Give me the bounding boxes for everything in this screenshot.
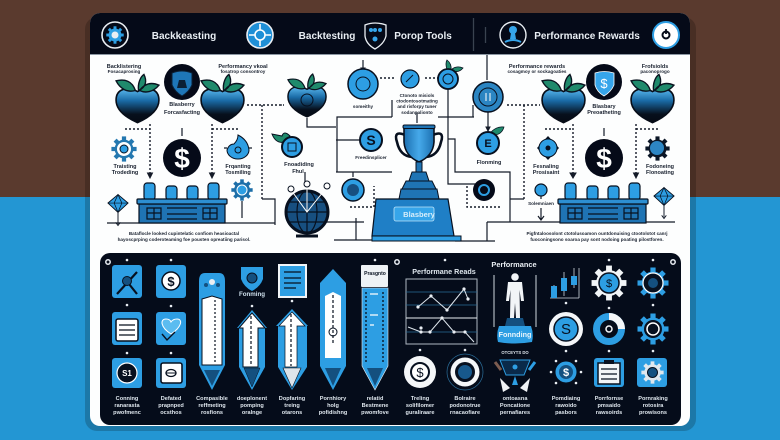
header icon: target bbox=[247, 22, 273, 48]
right center label bbox=[587, 104, 621, 116]
right center label: Preoatheting bbox=[587, 110, 621, 116]
dark circle icon bbox=[473, 179, 495, 201]
blue gear bbox=[638, 268, 668, 298]
bottom labels left: Conning bbox=[116, 396, 139, 402]
gear right label: Flonoating bbox=[646, 170, 674, 176]
label: holg bbox=[327, 403, 339, 409]
shield badge right: $ bbox=[600, 76, 608, 91]
label: rosfions bbox=[201, 410, 223, 416]
header icon: shield bbox=[365, 23, 386, 49]
white gear: $ bbox=[606, 278, 612, 290]
leaf icon label: Fnoadiding bbox=[284, 162, 314, 168]
label: rawsoirds bbox=[596, 410, 622, 416]
gear square bbox=[637, 358, 667, 387]
pin label bbox=[533, 164, 559, 176]
label bbox=[279, 396, 306, 416]
right description bbox=[526, 231, 668, 242]
square icon: coin: S1 bbox=[122, 369, 132, 378]
diamond left bbox=[108, 195, 128, 225]
line chart: Performane Reads bbox=[412, 267, 476, 276]
labels right: Pomdiaing bbox=[552, 396, 581, 402]
right corner heading: Frofsiolds bbox=[642, 64, 668, 70]
arrow pencil 2 bbox=[237, 310, 267, 390]
center text block: sodanpalionto bbox=[401, 110, 433, 115]
trophy label: Blasbery bbox=[403, 210, 436, 219]
label: prapnped bbox=[158, 403, 184, 409]
planning icon: E bbox=[484, 138, 492, 150]
bottom labels left: pwofmenc bbox=[113, 410, 141, 416]
labels middle: solifilomer bbox=[406, 403, 435, 409]
blue gear ring bbox=[638, 314, 668, 344]
pin label: Fesnaling bbox=[533, 164, 559, 170]
labels right: rawoido bbox=[555, 403, 577, 409]
left center label: Blasberry bbox=[169, 102, 196, 108]
header dividers bbox=[474, 18, 486, 51]
white gear bbox=[592, 266, 626, 300]
pencil 5 with tag bbox=[361, 265, 388, 390]
middle apple icon bbox=[288, 74, 326, 117]
S icon bbox=[360, 129, 382, 151]
pencil 1 bbox=[199, 273, 225, 390]
small gear circle bbox=[342, 179, 364, 201]
background: blue bottom bbox=[0, 197, 780, 440]
diamond right bbox=[654, 188, 674, 218]
trophy bbox=[372, 125, 461, 241]
center right target bbox=[473, 82, 503, 112]
label: pomping bbox=[240, 403, 264, 409]
top middle circle bbox=[348, 69, 378, 99]
performance labels bbox=[500, 396, 530, 416]
left block: heading bbox=[107, 64, 141, 74]
right corner heading bbox=[640, 64, 670, 74]
left block: heading: Backlistering bbox=[107, 64, 141, 70]
performance figure: OTCEYTS DO bbox=[501, 350, 529, 355]
apple icon right 1 bbox=[542, 74, 585, 123]
center leaf icon bbox=[438, 60, 463, 89]
gear right bbox=[645, 136, 670, 161]
label bbox=[595, 396, 623, 416]
label: doeplonent bbox=[237, 396, 267, 402]
labels middle: guraliraare bbox=[406, 410, 434, 416]
ring icon dark bbox=[447, 354, 483, 390]
dollar badge right: $ bbox=[596, 143, 612, 174]
performance figure: Performance bbox=[491, 260, 537, 269]
square icon: key bbox=[112, 265, 142, 298]
header label: Backtesting bbox=[299, 31, 355, 42]
line chart bbox=[406, 267, 477, 344]
left description: hayoscprping coderoteaming foe pousten opreatiing parisol. bbox=[118, 237, 250, 242]
planning icon bbox=[477, 127, 504, 154]
gear label: Traisting bbox=[114, 164, 136, 170]
right corner heading: paconoprogo bbox=[640, 69, 670, 74]
performance figure bbox=[491, 260, 537, 416]
candlestick chart bbox=[550, 268, 579, 298]
square icon: coin bbox=[112, 358, 142, 388]
gear with stem bbox=[231, 179, 253, 218]
header bar bbox=[90, 13, 690, 55]
S icon label: Freedinsplicer bbox=[355, 155, 387, 160]
dollar burst bbox=[550, 360, 582, 384]
background: brown top bbox=[0, 0, 780, 197]
header label: Backkeasting bbox=[152, 31, 216, 42]
header label: Porop Tools bbox=[394, 31, 452, 42]
blue bench right bbox=[558, 183, 648, 223]
label: Defated bbox=[161, 396, 182, 402]
label bbox=[196, 396, 228, 416]
small icon with arrow bbox=[528, 184, 554, 220]
header icon: person bbox=[500, 22, 526, 48]
label: Pornhiory bbox=[320, 396, 347, 402]
ring coin bbox=[549, 312, 583, 346]
label: rnacaofiare bbox=[450, 410, 480, 416]
square icon: dollar bbox=[156, 265, 186, 298]
performance labels: ontoasna bbox=[503, 396, 528, 402]
label bbox=[237, 396, 267, 416]
labels middle bbox=[406, 396, 435, 416]
banner bbox=[497, 326, 533, 344]
corner dots bbox=[106, 260, 675, 264]
left description bbox=[118, 231, 250, 242]
label: pwomfove bbox=[361, 410, 389, 416]
label: podonotrue bbox=[449, 403, 481, 409]
ring icon dollar: $ bbox=[416, 365, 424, 380]
right description: Pigfntaloosolont ctotolusoamon ountdonuising ctootolotot canrj bbox=[526, 231, 668, 236]
label: rotosira bbox=[643, 403, 664, 409]
shield with label bbox=[239, 267, 265, 298]
leaf icon bbox=[272, 133, 302, 157]
label: pofidishng bbox=[319, 410, 348, 416]
label bbox=[449, 396, 481, 416]
dollar badge left: $ bbox=[174, 143, 190, 174]
gear label bbox=[112, 164, 138, 176]
planning label: Flonming bbox=[477, 160, 501, 166]
left center label bbox=[164, 102, 200, 116]
right block: heading: Performance rewards bbox=[509, 64, 565, 70]
connector lines: upper diagram bbox=[107, 55, 675, 241]
dollar badge right bbox=[585, 139, 623, 177]
label: Bestmene bbox=[362, 403, 388, 409]
label: reffmeting bbox=[198, 403, 226, 409]
document icon bbox=[279, 265, 306, 297]
shield badge left bbox=[164, 64, 200, 100]
label bbox=[158, 396, 184, 416]
dollar badge left bbox=[163, 139, 201, 177]
card shadow bbox=[85, 17, 696, 431]
small connector dots bbox=[126, 259, 654, 354]
center text block bbox=[396, 93, 438, 115]
apple icon right 2 bbox=[631, 74, 674, 123]
label: relatid bbox=[367, 396, 384, 402]
leaf icon label: Fhul bbox=[292, 169, 304, 175]
bottom labels left bbox=[113, 396, 141, 416]
center text block: and risforpy tuner bbox=[397, 104, 437, 109]
label bbox=[361, 396, 389, 416]
right center label: Blasbary bbox=[592, 104, 617, 110]
label: oralnge bbox=[242, 410, 262, 416]
bottom labels left: ranarasta bbox=[114, 403, 140, 409]
dollar burst: $ bbox=[563, 367, 569, 379]
label: otarons bbox=[282, 410, 302, 416]
ring icon dollar bbox=[404, 356, 436, 388]
gear icon left bbox=[111, 136, 137, 162]
gear right label bbox=[646, 164, 674, 176]
flame label: Tosmiling bbox=[225, 170, 251, 176]
right block: heading bbox=[508, 64, 567, 74]
infographic card bbox=[90, 13, 690, 426]
flame label bbox=[225, 164, 251, 176]
small label: someithy bbox=[353, 104, 374, 109]
globe icon bbox=[286, 181, 330, 236]
center text block: Ctonoto misiols bbox=[400, 93, 435, 98]
labels middle: Treling bbox=[411, 396, 430, 402]
center small icon bbox=[401, 70, 419, 88]
header label: Performance Rewards bbox=[534, 31, 640, 42]
label: Compasible bbox=[196, 396, 228, 402]
left block: heading 2 bbox=[218, 64, 268, 74]
square icon: box bbox=[156, 358, 186, 388]
S icon: S bbox=[366, 132, 376, 148]
apple icon left 1 bbox=[116, 74, 159, 123]
label: pmsaido bbox=[597, 403, 621, 409]
performance labels: pernafiares bbox=[500, 410, 530, 416]
banner: Fonnding bbox=[499, 330, 531, 339]
square icon: note bbox=[112, 312, 142, 345]
shield with label: Fonming bbox=[239, 291, 265, 298]
label: prowisons bbox=[639, 410, 667, 416]
label: ocsthos bbox=[160, 410, 182, 416]
header icon: gear bbox=[102, 22, 128, 48]
flame icon bbox=[224, 135, 252, 159]
square icon: dollar: $ bbox=[167, 274, 175, 289]
progress ring bbox=[596, 316, 622, 342]
square icon: heart bbox=[156, 312, 186, 345]
header icon: power bbox=[653, 22, 679, 48]
label bbox=[638, 396, 668, 416]
left block: heading 2: fosatrop consontroy bbox=[221, 69, 266, 74]
bottom panel bbox=[100, 253, 681, 425]
left block: heading: Fosacaprosing bbox=[108, 69, 141, 74]
labels right bbox=[552, 396, 581, 416]
left block: heading 2: Performancy vkoal bbox=[218, 64, 268, 70]
leaf icon label bbox=[284, 162, 314, 175]
pin icon right bbox=[537, 136, 559, 160]
label: Porrfornse bbox=[595, 396, 623, 402]
gear label: Trodeding bbox=[112, 170, 138, 176]
labels right: pasbors bbox=[555, 410, 577, 416]
right block: heading: cosagmoy or sockagoaties bbox=[508, 69, 567, 74]
left description: Bataflocle looked cupintelatic confiom heasioactal bbox=[129, 231, 239, 236]
apple icon left 2 bbox=[201, 74, 244, 123]
center text block: ctodontosotmating bbox=[396, 98, 438, 104]
left center label: Forcasfacting bbox=[164, 110, 200, 116]
ring coin: S bbox=[561, 321, 571, 338]
label: Dopfaring bbox=[279, 396, 306, 402]
shield badge right bbox=[586, 64, 622, 100]
performance labels: Poncatione bbox=[500, 403, 530, 409]
hammock icon bbox=[495, 360, 535, 392]
label: treing bbox=[284, 403, 300, 409]
label: Bolraire bbox=[454, 396, 476, 402]
clipboard square bbox=[594, 358, 624, 387]
flame label: Frqanting bbox=[225, 164, 251, 170]
label: Pornraking bbox=[638, 396, 668, 402]
pin label: Prosisaint bbox=[533, 170, 559, 176]
label bbox=[319, 396, 348, 416]
pencil 5 with tag: Prasgnto bbox=[364, 271, 386, 277]
blue bench left bbox=[137, 183, 227, 223]
small icon with arrow: Solemniaen bbox=[528, 201, 554, 206]
right description: fuoconingsono soaroa pay sont nodoing poating pilostforen. bbox=[530, 237, 664, 242]
arrow pencil 3 bbox=[276, 309, 308, 390]
gear right label: Fodoneing bbox=[646, 164, 674, 170]
pencil 4 bbox=[320, 269, 346, 390]
